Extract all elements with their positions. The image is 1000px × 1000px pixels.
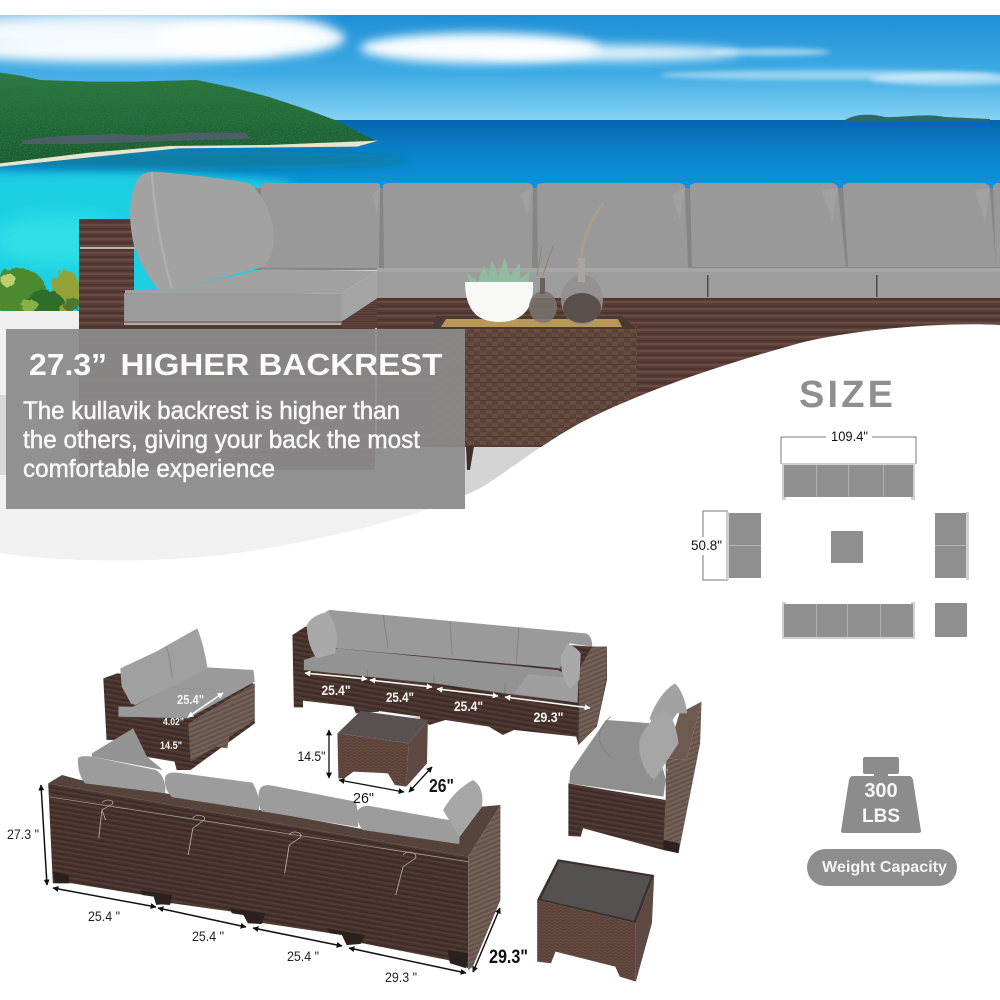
arrows: seat widths [305, 673, 590, 708]
seat width labels: 25.4" [454, 698, 483, 714]
corner seat [124, 269, 377, 328]
icon: weight: LBS [862, 806, 900, 827]
panel heading: 27.3” [29, 347, 107, 382]
left sofa labels: 25.4" [177, 692, 204, 707]
panel description: the others, giving your back the most [23, 426, 420, 454]
weight capacity badge: Weight Capacity [822, 859, 947, 876]
depth dimension 50.8 [691, 511, 728, 580]
right two-seat plan [935, 512, 969, 580]
bottom four-seat plan [782, 602, 915, 639]
front sofa dimension arrows [41, 785, 500, 973]
left sofa labels [160, 692, 204, 752]
front sofa dimension labels: 29.3 " [385, 969, 417, 985]
corner table plan [935, 603, 967, 637]
wicker frame [292, 627, 607, 745]
size section [691, 374, 969, 639]
near pillow [443, 780, 482, 837]
sofa: right two-seat [568, 683, 702, 853]
center ottoman [298, 711, 454, 807]
width dimension 109.4 [781, 429, 916, 464]
plant pot with succulent [465, 258, 533, 322]
glass vases [529, 202, 604, 325]
headland [0, 73, 379, 167]
seat [569, 720, 666, 797]
front sofa dimension labels [7, 826, 528, 985]
glass top [537, 859, 654, 923]
ottoman dimension labels [298, 748, 454, 807]
front sofa dimension labels: 25.4 " [287, 948, 319, 964]
wicker side [468, 805, 500, 970]
ottoman dimension arrows [329, 730, 432, 792]
back cushions [317, 610, 592, 668]
bushes [0, 268, 79, 311]
front sofa dimension labels: 25.4 " [192, 928, 224, 944]
back cushions [261, 183, 1000, 268]
sofa: left two-seat [103, 628, 255, 770]
turquoise shallows [0, 170, 310, 330]
rear cushions [78, 756, 460, 844]
seat width labels: 25.4" [322, 682, 350, 698]
sofa wicker base [79, 219, 1000, 470]
rod and ties [48, 797, 468, 895]
center table plan [831, 531, 863, 563]
weight capacity badge [807, 849, 957, 886]
feet [53, 872, 468, 968]
cushion gap shadow [255, 188, 1000, 270]
table side [636, 875, 654, 982]
pillows [307, 612, 337, 658]
far island [845, 115, 990, 122]
sofa: front four-seat rear view [7, 728, 528, 985]
front sofa dimension labels: 27.3 " [7, 826, 39, 842]
wicker rear face [48, 783, 468, 968]
ottoman dimension labels: 26" [353, 790, 374, 807]
top four-seat plan [782, 463, 915, 500]
corner table [537, 859, 654, 982]
far pillow [92, 728, 163, 770]
panel description [23, 397, 420, 483]
sofa: top four-seat [292, 610, 607, 745]
back [120, 628, 208, 705]
side pillow [130, 172, 274, 290]
pillows [650, 683, 687, 737]
clouds [0, 10, 1000, 85]
front sofa dimension labels: 25.4 " [88, 908, 120, 924]
seat width labels [322, 682, 564, 725]
sky [0, 15, 1000, 121]
wicker front [568, 783, 666, 850]
seat front band [377, 268, 1000, 298]
front sofa dimension labels: 29.3" [489, 947, 528, 968]
width dimension 109.4: 109.4" [831, 429, 868, 444]
seat cushions [304, 648, 578, 703]
icon: weight [841, 757, 921, 833]
weight capacity [807, 757, 957, 886]
size heading: SIZE [799, 374, 893, 416]
seat width labels: 29.3" [534, 709, 564, 725]
floor [0, 311, 79, 329]
wicker frame [103, 673, 255, 770]
depth dimension 50.8: 50.8" [691, 538, 722, 553]
hero photo: seaside sofa [0, 10, 1000, 569]
panel description: The kullavik backrest is higher than [23, 397, 400, 425]
ottoman dimension labels: 26" [429, 776, 454, 796]
left sofa labels: 14.5" [160, 740, 182, 752]
ottoman dimension labels: 14.5" [298, 748, 326, 764]
seat [118, 667, 255, 718]
left sofa labels: 4.02" [163, 717, 184, 728]
left two-seat plan [726, 512, 761, 580]
table front [537, 900, 636, 982]
panel heading: HIGHER BACKREST [120, 347, 443, 382]
arrow: seat depth [188, 693, 223, 717]
wicker top rim [48, 775, 500, 857]
wicker side [663, 702, 702, 853]
panel background [6, 329, 465, 509]
text panel: 27.3 inch higher backrest [6, 329, 465, 509]
sea [0, 120, 1000, 188]
panel description: comfortable experience [23, 455, 275, 483]
seat width labels: 25.4" [386, 689, 414, 705]
side table [432, 316, 637, 470]
icon: weight: 300 [864, 780, 898, 802]
